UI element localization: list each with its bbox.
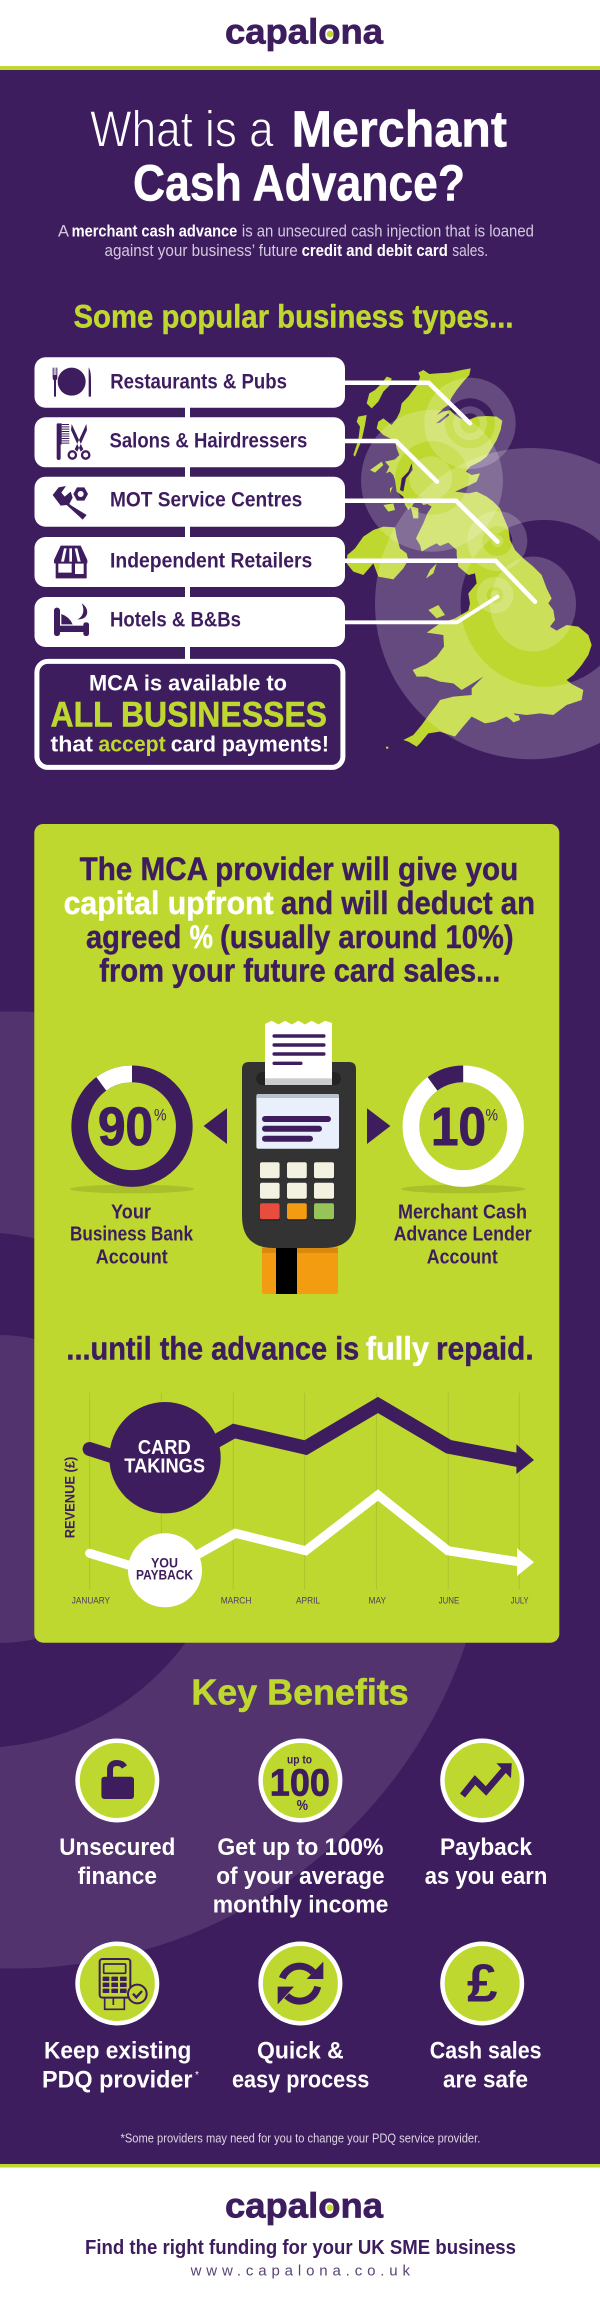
footer logo: capalona — [225, 2186, 384, 2225]
business type: salons: Salons & Hairdressers — [110, 430, 307, 453]
heading: key benefits: Key Benefits — [191, 1671, 409, 1712]
intro text — [58, 223, 534, 260]
month labels: APRIL — [296, 1595, 320, 1605]
series: you payback: PAYBACK — [136, 1567, 193, 1582]
callout: available to all businesses: that — [50, 732, 94, 757]
title: Cash Advance? — [133, 155, 465, 212]
benefit: keep existing PDQ provider: * — [195, 2070, 199, 2081]
benefit: up to 100 percent: Get up to 100% — [217, 1834, 384, 1861]
donut: 10 percent: % — [486, 1106, 498, 1125]
intro text: A — [58, 223, 69, 241]
heading: until fully repaid: repaid. — [436, 1330, 534, 1366]
icon: comb and scissors — [57, 423, 89, 460]
donut: 10 percent: 10 — [431, 1097, 486, 1157]
heading: popular business types: Some popular business types... — [74, 299, 514, 335]
benefit: payback as you earn: Payback — [440, 1834, 532, 1861]
icon: pound sign: £ — [467, 1954, 498, 2014]
panel heading: from your future card sales... — [99, 953, 500, 989]
business type: retailers — [34, 537, 345, 587]
label: lender account: Account — [427, 1246, 498, 1268]
intro text: credit and debit card — [302, 242, 448, 260]
series: card takings — [90, 1402, 534, 1513]
axis label: REVENUE (£) — [62, 1457, 78, 1538]
label: bank account — [70, 1201, 194, 1268]
footnote: *Some providers may need for you to change your PDQ service provider. — [120, 2131, 480, 2145]
connectors from list to map — [345, 383, 535, 622]
benefit: up to 100 percent: of your average — [216, 1863, 385, 1890]
business type: MOT: MOT Service Centres — [110, 489, 302, 512]
series: card takings: CARD — [138, 1437, 191, 1459]
benefit: unsecured finance: Unsecured — [59, 1834, 175, 1861]
series: you payback — [90, 1495, 534, 1607]
tagline: Find the right funding for your UK SME business — [85, 2237, 516, 2259]
business type: salons — [34, 417, 345, 467]
panel heading: (usually around 10%) — [220, 919, 514, 955]
benefit: keep existing PDQ provider: Keep existing — [44, 2037, 191, 2064]
benefit: cash sales are safe — [430, 1944, 542, 2093]
donut: 90 percent: 90 — [98, 1097, 153, 1157]
series: card takings: TAKINGS — [124, 1456, 205, 1478]
label: bank account: Business Bank — [70, 1224, 194, 1246]
business type: restaurants: Restaurants & Pubs — [110, 370, 287, 393]
callout: available to all businesses: accept — [98, 732, 166, 757]
benefit: quick and easy process — [232, 1944, 369, 2093]
heading: until fully repaid: ...until the advance is — [66, 1330, 359, 1366]
header band — [0, 0, 600, 70]
title: Merchant — [292, 101, 507, 158]
benefit: payback as you earn: as you earn — [425, 1863, 547, 1890]
panel heading: The MCA provider will give you — [80, 851, 518, 887]
heading: until fully repaid: fully — [366, 1330, 429, 1366]
label: lender account: Merchant Cash — [398, 1201, 527, 1223]
arrow: right — [367, 1108, 390, 1144]
series: you payback: YOU — [151, 1555, 178, 1570]
intro text: merchant cash advance — [72, 223, 237, 241]
title — [90, 101, 507, 212]
donut: 10 percent — [401, 1074, 525, 1193]
month labels: JUNE — [439, 1595, 459, 1605]
donut: 90 percent: % — [154, 1106, 166, 1125]
logo: capalona — [225, 12, 384, 52]
donut: 90 percent — [70, 1074, 194, 1193]
icon: plate and cutlery — [53, 367, 91, 397]
card terminal illustration — [242, 1021, 356, 1294]
heading: until fully repaid — [66, 1330, 534, 1366]
icon: rising arrow — [462, 1763, 512, 1796]
title: What is a — [90, 101, 274, 158]
panel heading: % — [190, 919, 213, 955]
callout: available to all businesses: card payments! — [171, 732, 329, 757]
footer band — [0, 2164, 600, 2300]
benefit: quick and easy process: Quick & — [257, 2037, 344, 2064]
benefit: unsecured finance — [59, 1741, 175, 1890]
icon: shop — [54, 546, 87, 578]
label: bank account: Your — [111, 1201, 151, 1223]
panel heading — [64, 851, 535, 989]
intro text: is an unsecured cash injection that is loaned — [242, 223, 534, 241]
business type: MOT — [34, 477, 345, 527]
icon: up to 100% — [270, 1752, 330, 1814]
benefit: up to 100 percent: monthly income — [213, 1892, 388, 1919]
benefit: unsecured finance: finance — [78, 1863, 157, 1890]
month labels — [72, 1595, 529, 1605]
business type: hotels: Hotels & B&Bs — [110, 609, 241, 632]
icon: bed and moon — [54, 603, 89, 636]
intro text: sales. — [452, 242, 488, 260]
callout: available to all businesses: ALL BUSINESSES — [50, 696, 327, 735]
month labels: JULY — [511, 1595, 529, 1605]
benefit: keep existing PDQ provider: PDQ provider — [42, 2066, 193, 2093]
icon: wrench and nut — [53, 486, 88, 520]
business type: retailers: Independent Retailers — [110, 549, 312, 572]
benefit: quick and easy process: easy process — [232, 2066, 369, 2093]
panel heading: capital upfront — [64, 885, 274, 921]
benefit: cash sales are safe: are safe — [443, 2066, 528, 2093]
business type: restaurants — [34, 357, 345, 408]
icon: refresh arrows — [278, 1962, 323, 2004]
panel heading: and will deduct an — [281, 885, 535, 921]
callout: available to all businesses: MCA is available to — [89, 671, 287, 696]
month labels: JANUARY — [72, 1595, 110, 1605]
benefit: payback as you earn — [425, 1741, 547, 1890]
intro text: against your business’ future — [104, 242, 298, 260]
icon: PDQ terminal with tick — [100, 1959, 147, 2009]
icon: up to 100%: % — [297, 1797, 308, 1814]
label: bank account: Account — [96, 1246, 168, 1268]
business type: hotels — [34, 597, 345, 647]
panel heading: agreed — [86, 919, 181, 955]
label: lender account — [394, 1201, 532, 1268]
label: lender account: Advance Lender — [394, 1224, 532, 1246]
panel: how MCA works — [34, 824, 559, 1643]
website: www.capalona.co.uk — [190, 2263, 410, 2280]
line chart: revenue — [62, 1393, 534, 1607]
benefit: keep existing PDQ provider — [42, 1944, 199, 2093]
arrow: left — [204, 1108, 227, 1144]
UK map with radiating rings — [347, 368, 600, 759]
map: translucent rings — [361, 378, 600, 759]
benefit: up to 100 percent — [213, 1741, 388, 1919]
background ring decoration — [0, 1012, 491, 1968]
month labels: MARCH — [221, 1595, 251, 1605]
icon: open padlock — [101, 1763, 134, 1799]
icon: up to 100%: up to — [287, 1752, 312, 1766]
icon: up to 100%: 100 — [270, 1763, 330, 1805]
benefit: cash sales are safe: Cash sales — [430, 2037, 542, 2064]
map: landmass — [347, 368, 592, 749]
callout: available to all businesses — [37, 661, 343, 767]
month labels: MAY — [369, 1595, 386, 1605]
list spine — [185, 400, 190, 662]
